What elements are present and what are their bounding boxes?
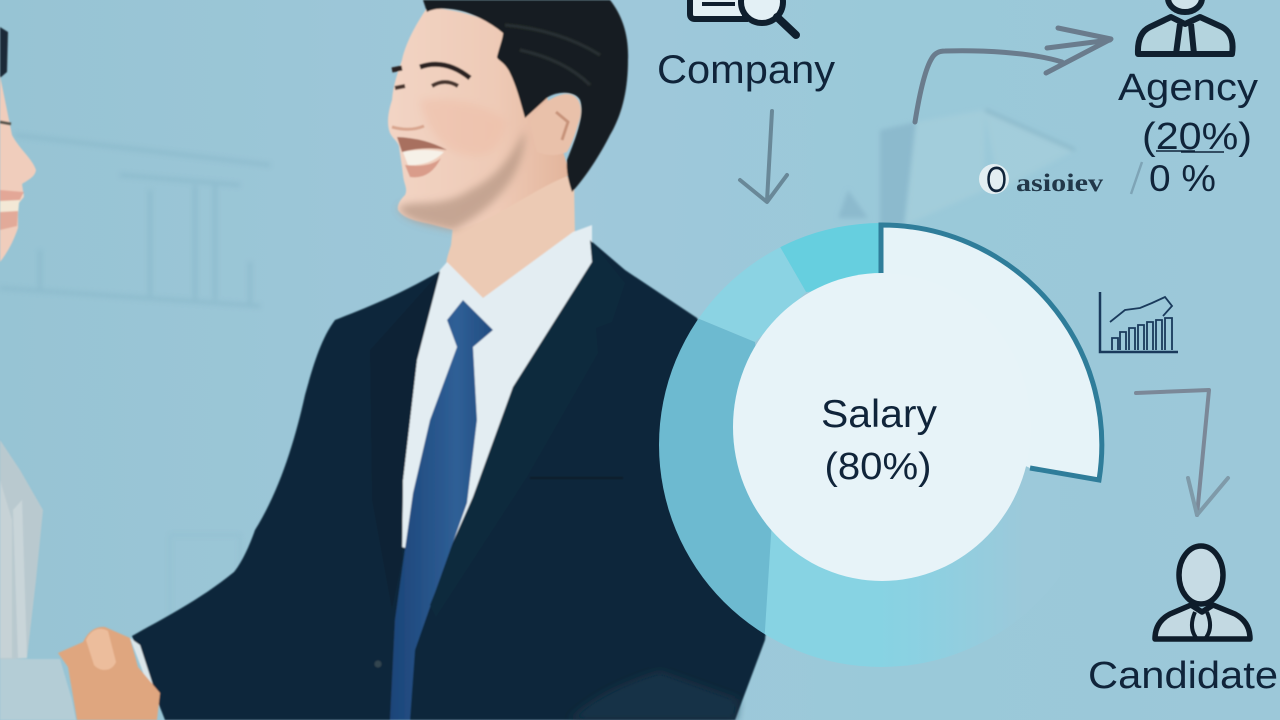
faded office building right: [838, 110, 1075, 225]
woman face: [0, 76, 36, 262]
left lapel: [370, 272, 440, 610]
segment: left dark teal: [659, 318, 772, 635]
lower arm shading: [570, 672, 738, 720]
icon: company document and magnifier: [690, 0, 796, 35]
salary wedge: [881, 225, 1102, 480]
ear: [530, 94, 581, 155]
clasped hands: [58, 627, 160, 720]
jacket pocket: [530, 477, 623, 479]
right lapel: [430, 240, 625, 617]
salary label: (80%): [824, 446, 932, 488]
jacket button: [374, 660, 382, 668]
hair highlight: [505, 25, 600, 85]
woman shoulder: [0, 440, 43, 660]
faded office building left: [0, 135, 270, 650]
company label: Company: [657, 48, 835, 92]
agency label: (20%): [1142, 116, 1252, 158]
man in suit: [58, 0, 780, 720]
segment: top teal: [780, 223, 878, 292]
shirt: [402, 225, 592, 560]
tie: [390, 300, 493, 720]
arrow: to candidate: [1136, 390, 1228, 515]
beard: [398, 130, 525, 230]
garbled label with zero percent: [979, 158, 1216, 200]
icon: growth bar chart: [1100, 292, 1178, 352]
woman sleeve: [0, 659, 76, 720]
icon: agency person: [1138, 0, 1233, 54]
arrow: curved to agency: [915, 28, 1111, 122]
garbled label with zero percent: 0 %: [1149, 158, 1216, 199]
woman at left edge: [0, 27, 76, 720]
candidate label: Candidate: [1088, 655, 1278, 697]
segment: bottom light teal: [764, 530, 964, 667]
salary centre circle: [733, 273, 1031, 581]
eyebrow and eyes: [392, 64, 470, 78]
agency label: Agency: [1118, 67, 1258, 109]
agency label: [1118, 67, 1258, 158]
donut chart: [640, 200, 1102, 720]
woman hair: [0, 27, 8, 78]
neck: [446, 160, 575, 298]
mouth: [403, 150, 444, 165]
woman lips and teeth: [0, 194, 24, 214]
salary label: [821, 393, 938, 488]
face: [388, 8, 570, 230]
hair: [423, 0, 628, 192]
jacket: [132, 240, 780, 720]
garbled label with zero percent: O: [986, 159, 1007, 200]
icon: candidate person: [1155, 546, 1250, 639]
arrow: company to salary: [740, 111, 787, 202]
woman eye: [0, 122, 11, 124]
segment: light teal: [699, 248, 806, 342]
garbled label with zero percent: asioiev: [1016, 170, 1104, 197]
nose shadow: [392, 126, 424, 129]
salary label: Salary: [821, 393, 938, 436]
cheek blush: [420, 99, 505, 156]
cuff: [130, 638, 153, 685]
